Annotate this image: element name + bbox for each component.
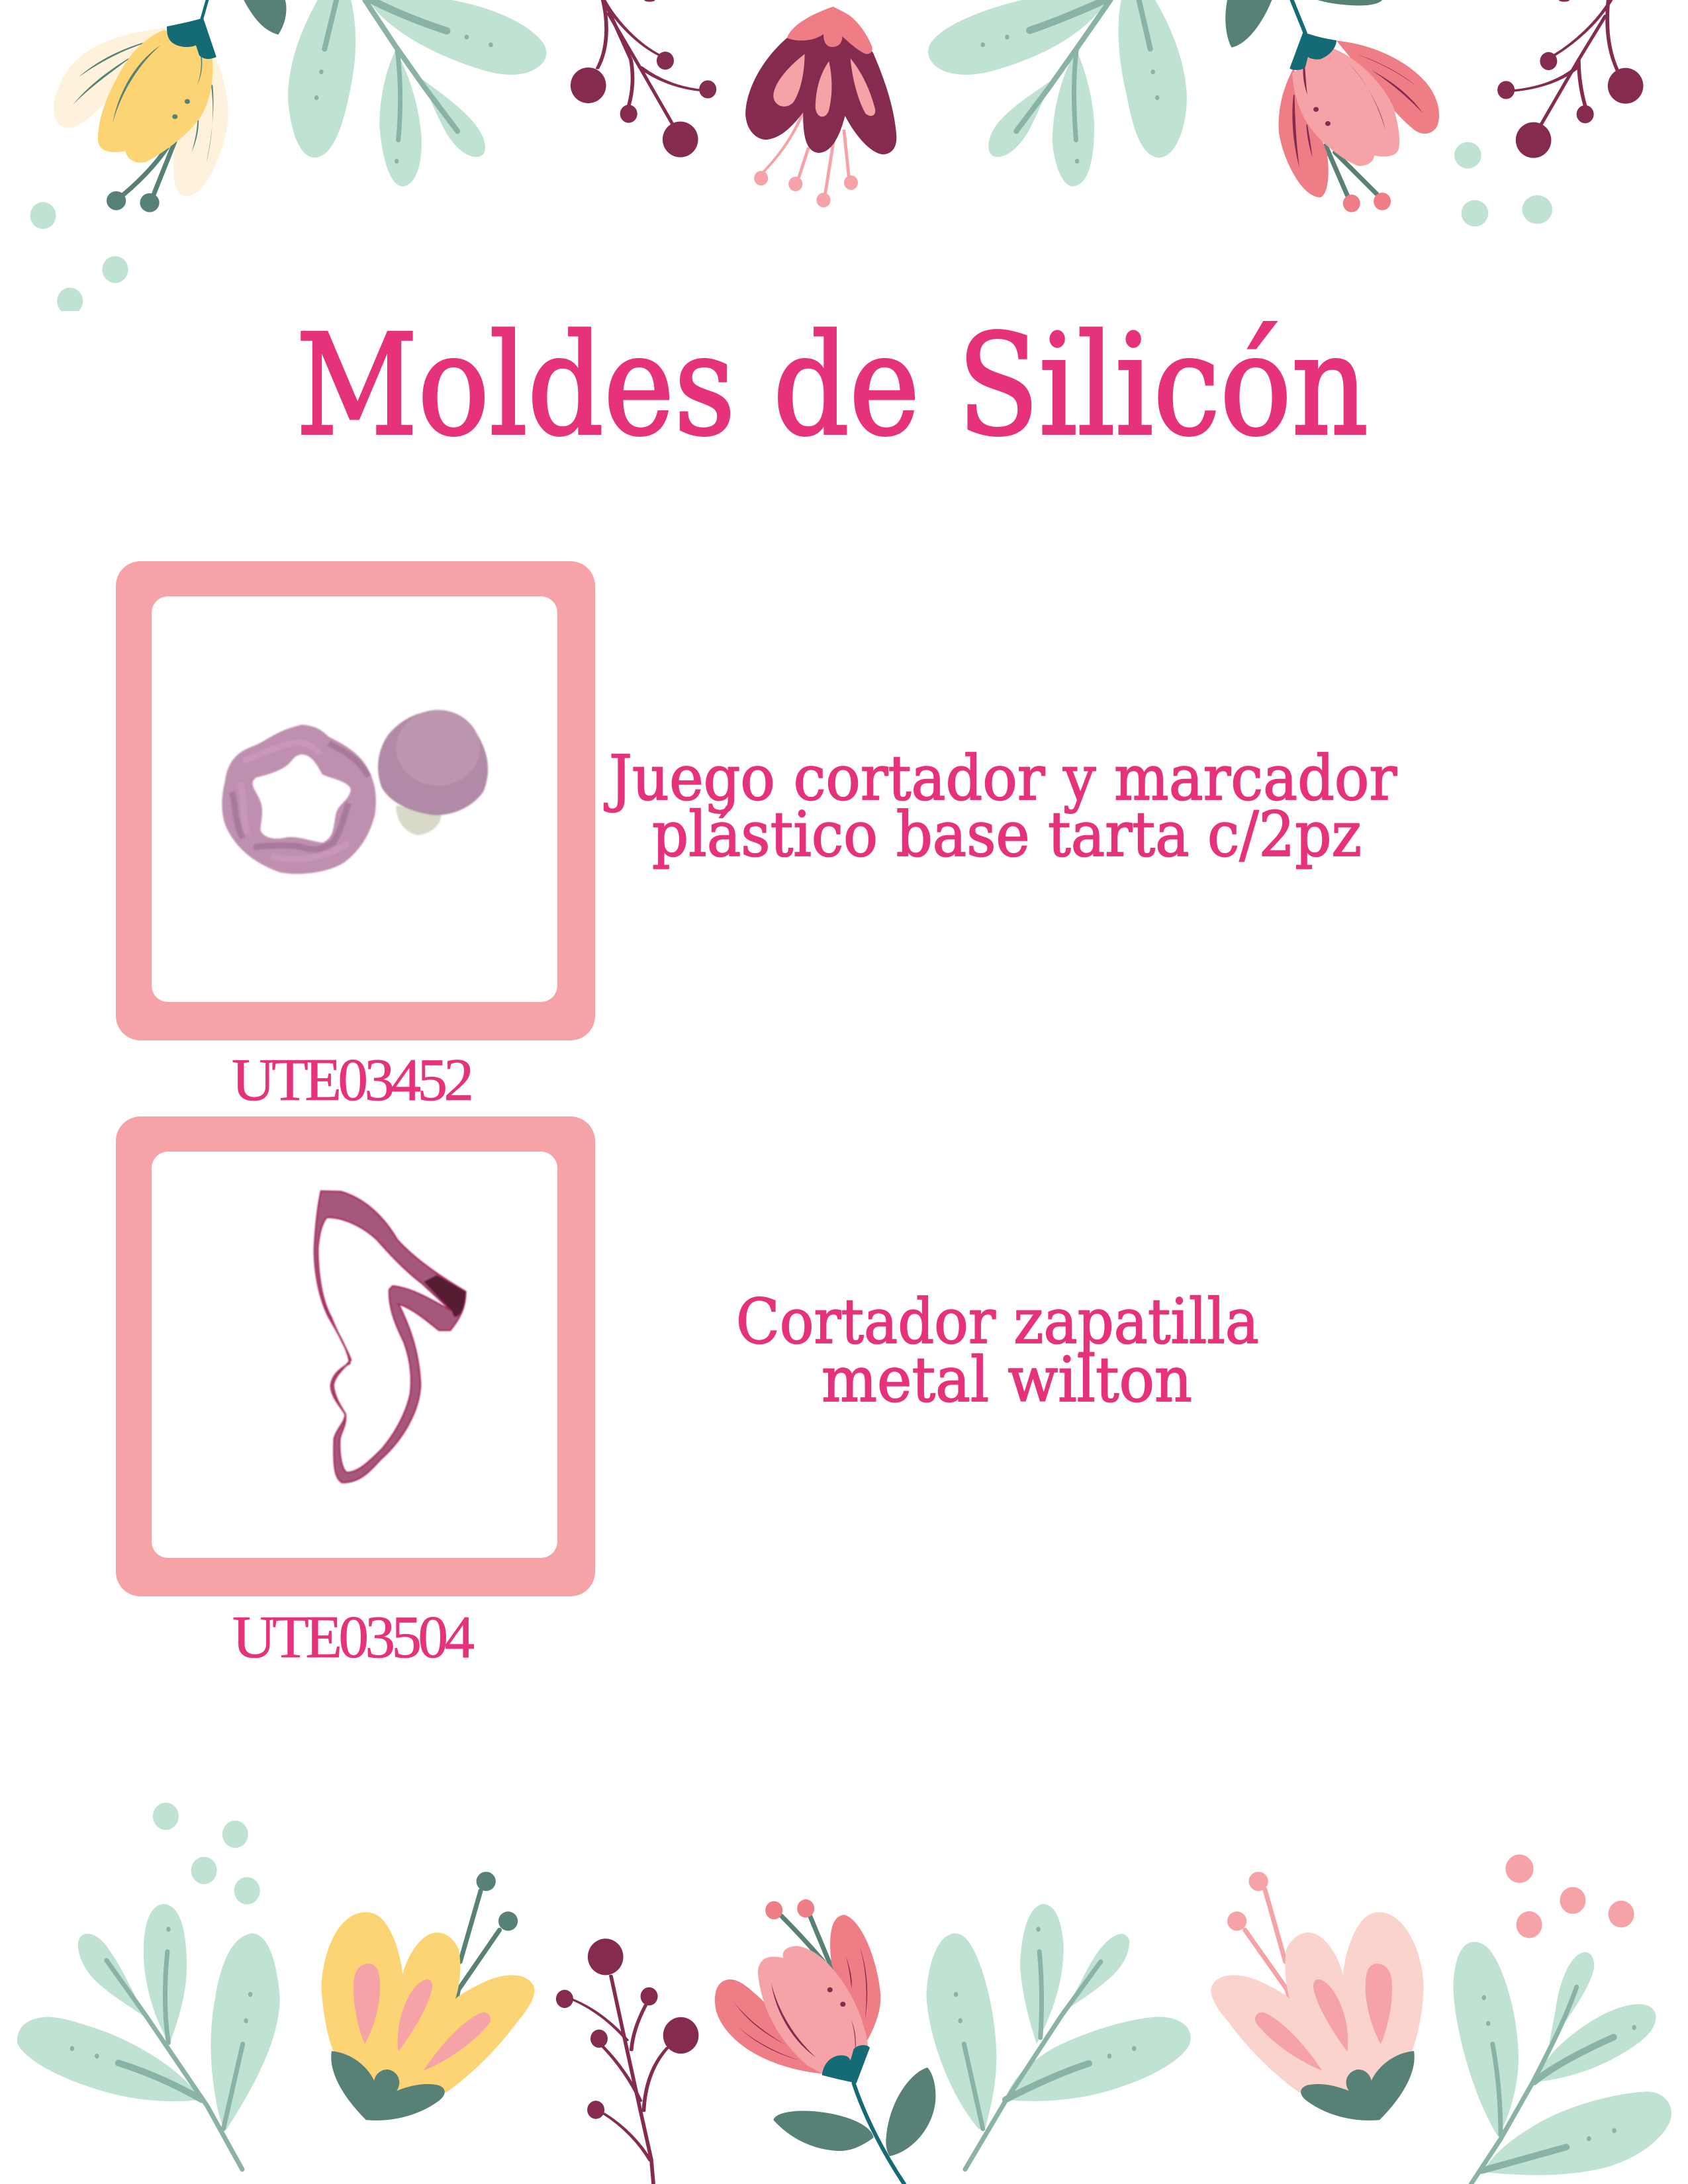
icon: maroon berries top right	[1497, 0, 1643, 158]
product description: metal wilton	[821, 1344, 1192, 1416]
icon: maroon centre flower	[745, 7, 896, 207]
top floral border, left half	[30, 0, 896, 314]
icon: peach flower bottom	[1211, 1872, 1424, 2120]
icon: salmon hanging flower	[1279, 0, 1439, 212]
decorative mint dots top right	[1454, 142, 1552, 226]
icon: yellow hanging flower	[54, 0, 228, 212]
product description: Cortador zapatilla	[736, 1286, 1259, 1358]
icon: dark green leaves top right	[1225, 0, 1382, 48]
icon: mint leaf branch bottom centre	[926, 1904, 1191, 2169]
panel: product 2	[116, 1116, 1259, 1670]
bottom floral border, right half	[926, 1854, 1671, 2184]
decorative mint dots top left	[30, 202, 128, 314]
title: Moldes de Silicón	[296, 304, 1368, 467]
icon: mint leaf branch top left	[288, 0, 546, 187]
icon: yellow flower bottom	[321, 1872, 535, 2120]
icon: maroon berries bottom	[556, 1938, 698, 2184]
icon: maroon berries top left	[571, 0, 716, 158]
image frame	[116, 561, 595, 1040]
product image: pink star cutter and stamp	[222, 710, 488, 874]
product description: Juego cortador y marcador	[604, 743, 1397, 815]
decorative pink dots bottom right	[1505, 1854, 1634, 1938]
panel: product 1	[116, 561, 1397, 1113]
icon: mint leaf branch bottom left	[17, 1904, 280, 2169]
icon: mint leaf branch bottom right	[1453, 1942, 1671, 2184]
icon: dark green leaf top left	[244, 0, 286, 34]
product code: UTE03504	[232, 1604, 475, 1670]
image frame	[116, 1116, 595, 1596]
product description	[736, 1286, 1259, 1416]
icon: salmon flower bottom centre	[715, 1899, 935, 2184]
decorative mint dots bottom left	[153, 1803, 260, 1905]
product image: ballet shoe cutter	[314, 1191, 465, 1482]
product description: plástico base tarta c/2pz	[652, 799, 1362, 871]
icon: mint leaf branch top right	[928, 0, 1187, 187]
product code: UTE03452	[232, 1046, 474, 1113]
bottom floral border, left half	[17, 1803, 935, 2184]
top floral border, right half	[928, 0, 1643, 226]
product description	[604, 743, 1397, 871]
